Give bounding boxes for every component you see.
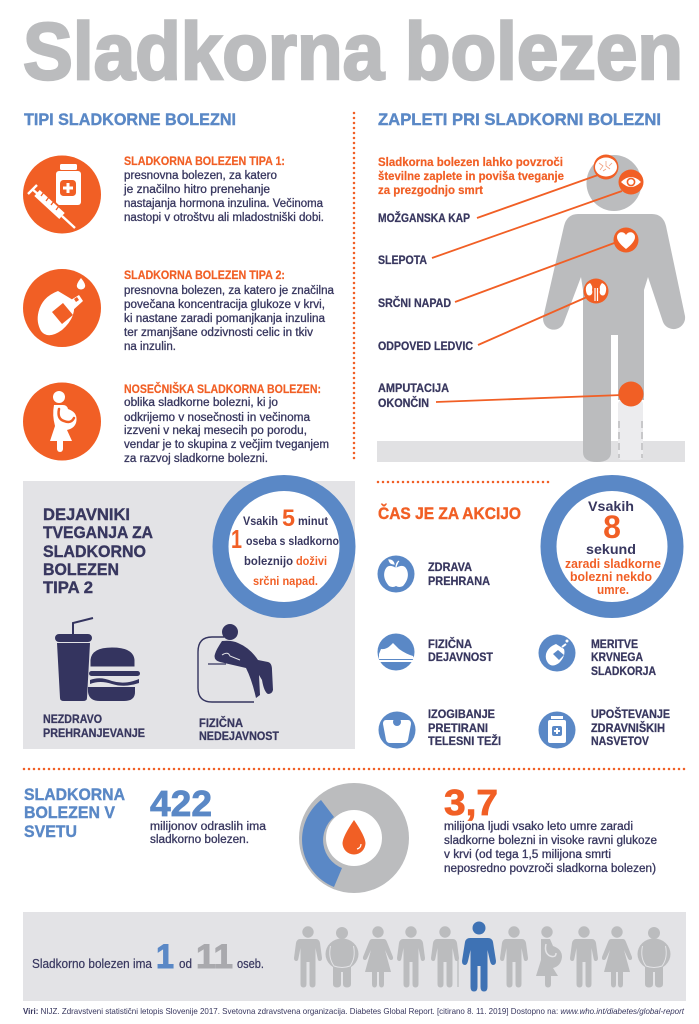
label: blood sugar measurement: KRVNEGA bbox=[591, 652, 643, 664]
heading: risk factors: TVEGANJA ZA bbox=[43, 523, 153, 542]
donut chart with blood drop bbox=[299, 783, 409, 893]
label: physical inactivity: NEDEJAVNOST bbox=[199, 731, 279, 743]
label: avoid overweight: PRETIRANI bbox=[428, 723, 488, 735]
label: blood sugar measurement bbox=[591, 639, 656, 678]
icon: medicine bottle bbox=[538, 712, 576, 748]
text: type 1: nastopi v otroštvu ali mladostniški dobi. bbox=[124, 212, 324, 224]
text: type 2: povečana koncentracija glukoze v krvi, bbox=[124, 299, 325, 311]
text: type 2: ki nastane zaradi pomanjkanja inzulina bbox=[124, 313, 326, 325]
label: amputation bbox=[378, 383, 449, 410]
label: physical inactivity bbox=[199, 717, 279, 743]
panel: complications bbox=[377, 110, 685, 462]
callout: every 8 seconds: 8 bbox=[603, 509, 621, 545]
panel: types of diabetes bbox=[23, 110, 335, 465]
text: gestational: NOSEČNIŠKA SLADKORNA BOLEZEN: bbox=[124, 383, 321, 396]
heading: risk factors: BOLEZEN bbox=[43, 560, 119, 579]
marker: amputation point bbox=[618, 382, 644, 406]
stat: 422 million: sladkorno bolezen. bbox=[150, 834, 249, 846]
text: gestational: za razvoj sladkorne bolezni. bbox=[124, 453, 268, 465]
panel: 1 in 11 people bbox=[23, 912, 686, 1001]
label: medical advice bbox=[591, 708, 670, 748]
label: avoid overweight: IZOGIBANJE bbox=[428, 709, 495, 721]
text: type 2: SLADKORNA BOLEZEN TIPA 2: bbox=[124, 270, 285, 282]
text: type 1: nastajanja hormona inzulina. Večinoma bbox=[124, 198, 324, 210]
callout: every 8 seconds: Vsakih bbox=[588, 498, 634, 514]
text: 1 in 11: oseb. bbox=[237, 957, 264, 971]
heading: world: SVETU bbox=[24, 822, 77, 841]
label: physical inactivity: FIZIČNA bbox=[199, 717, 243, 730]
text: complications intro bbox=[378, 157, 564, 197]
text: type 1 bbox=[123, 156, 324, 224]
stat: 422 million: milijonov odraslih ima bbox=[150, 821, 267, 833]
heading: risk factors: TIPA 2 bbox=[43, 578, 93, 597]
text: type 1: presnovna bolezen, za katero bbox=[124, 170, 277, 182]
icon: heart bbox=[614, 228, 638, 252]
text: complications intro: Sladkorna bolezen lahko povzroči bbox=[378, 157, 563, 169]
icon: weight scale bbox=[378, 712, 416, 748]
icon: pregnant woman bbox=[23, 382, 101, 460]
icon: meter small bbox=[538, 634, 576, 672]
stat: 3,7 million: milijona ljudi vsako leto umre zaradi bbox=[444, 821, 633, 833]
callout: every 8 seconds: sekund bbox=[586, 541, 636, 557]
label: amputation: OKONČIN bbox=[378, 397, 429, 410]
icon: apple bbox=[378, 556, 414, 592]
label: stroke: MOŽGANSKA KAP bbox=[378, 212, 470, 225]
label: physical activity: DEJAVNOST bbox=[428, 652, 493, 664]
text: 1 in 11: Sladkorno bolezen ima bbox=[32, 957, 152, 971]
heading: complications: ZAPLETI PRI SLADKORNI BOLEZNI bbox=[378, 110, 661, 129]
ground strip bbox=[377, 441, 685, 462]
source footnote: Viri: NIJZ. Zdravstveni statistični letopis Slovenije 2017. Svetovna zdravstvena organizacija. Diabetes Global Report. [citirano 8. 11. 2019] Dostopno na: www.who.int/diabetes/global-report bbox=[23, 1006, 685, 1016]
stat: 422 million bbox=[150, 783, 267, 846]
text: type 2: ter zmanjšane odzivnosti celic in tkiv bbox=[124, 327, 313, 339]
human figure bbox=[543, 155, 685, 462]
stat: 3,7 million: v krvi (od tega 1,5 milijona smrti bbox=[444, 849, 611, 861]
panel: risk factors bbox=[23, 481, 355, 749]
heading: time for action: ČAS JE ZA AKCIJO bbox=[378, 504, 521, 523]
label: medical advice: NASVETOV bbox=[591, 736, 649, 748]
callout: every 5 minutes: srčni napad. bbox=[253, 574, 318, 588]
callout: every 8 seconds: umre. bbox=[597, 583, 629, 597]
label: unhealthy diet: NEZDRAVO bbox=[43, 714, 102, 726]
icon: glucose meter bbox=[23, 269, 101, 347]
text: complications intro: številne zaplete in poviša tveganje bbox=[378, 171, 564, 183]
text: gestational: izzveni v nekaj mesecih po porodu, bbox=[124, 425, 307, 437]
icon: kidneys bbox=[584, 278, 608, 304]
callout: every 5 minutes: boleznijo bbox=[244, 554, 293, 568]
text: type 1: SLADKORNA BOLEZEN TIPA 1: bbox=[124, 156, 285, 168]
callout: every 8 seconds: zaradi sladkorne bbox=[565, 557, 661, 571]
person with cane bbox=[431, 926, 459, 988]
text: 1 in 11 bbox=[32, 938, 264, 976]
text: gestational: vendar je to skupina z večjim tveganjem bbox=[124, 439, 329, 451]
label: physical activity bbox=[428, 638, 493, 664]
icon: person on couch bbox=[198, 624, 273, 702]
pictogram: eleven people bbox=[294, 922, 670, 992]
text: type 2: presnovna bolezen, za katero je značilna bbox=[124, 285, 335, 297]
text: 1 in 11: 11 bbox=[196, 938, 233, 976]
heading: risk factors: SLADKORNO bbox=[43, 542, 146, 561]
label: unhealthy diet: PREHRANJEVANJE bbox=[43, 728, 145, 740]
text: gestational bbox=[124, 383, 329, 465]
heading: world: BOLEZEN V bbox=[24, 803, 116, 822]
label: unhealthy diet bbox=[43, 714, 145, 740]
label: kidney failure: ODPOVED LEDVIC bbox=[378, 341, 473, 353]
label: healthy diet: ZDRAVA bbox=[428, 562, 472, 574]
text: complications intro: za prezgodnjo smrt bbox=[378, 185, 483, 197]
connector lines bbox=[432, 175, 622, 402]
label: heart attack: SRČNI NAPAD bbox=[378, 297, 451, 310]
stat: 3,7 million: sladkorne bolezni in visoke ravni glukoze bbox=[444, 835, 657, 847]
heading: world: SLADKORNA bbox=[24, 785, 125, 804]
label: physical activity: FIZIČNA bbox=[428, 638, 472, 651]
callout: every 5 minutes: oseba s sladkorno bbox=[246, 534, 339, 548]
text: type 1: je značilno hitro prenehanje bbox=[123, 184, 270, 196]
callout: every 5 minutes: doživi bbox=[296, 554, 327, 568]
callout: every 5 minutes bbox=[220, 483, 348, 610]
text: gestational: oblika sladkorne bolezni, ki jo bbox=[124, 397, 278, 409]
label: blood sugar measurement: MERITVE bbox=[591, 639, 638, 651]
callout: every 5 minutes: Vsakih bbox=[243, 514, 278, 528]
label: blood sugar measurement: SLADKORJA bbox=[591, 666, 656, 678]
heading: risk factors bbox=[43, 505, 153, 597]
heading: types: TIPI SLADKORNE BOLEZNI bbox=[24, 110, 236, 129]
text: 1 in 11: od bbox=[179, 957, 192, 971]
callout: every 5 minutes: 1 bbox=[231, 524, 242, 554]
stat: 3,7 million: 3,7 bbox=[444, 782, 498, 823]
icon: drink and burger bbox=[55, 618, 140, 701]
label: blindness: SLEPOTA bbox=[378, 255, 427, 267]
text: 1 in 11: 1 bbox=[156, 938, 174, 976]
label: medical advice: UPOŠTEVANJE bbox=[591, 708, 670, 721]
label: avoid overweight: TELESNI TEŽI bbox=[428, 735, 501, 748]
icon: brain bbox=[594, 154, 618, 180]
heading: risk factors: DEJAVNIKI bbox=[43, 505, 130, 524]
highlighted person bbox=[462, 922, 496, 992]
callout: every 8 seconds bbox=[548, 483, 676, 610]
panel: diabetes in the world bbox=[24, 782, 657, 893]
label: avoid overweight bbox=[428, 709, 501, 748]
label: amputation: AMPUTACIJA bbox=[378, 383, 449, 395]
stat: 3,7 million bbox=[444, 782, 657, 875]
icon: shoe bbox=[378, 634, 414, 670]
pregnant woman bbox=[536, 926, 562, 988]
callout: every 8 seconds: bolezni nekdo bbox=[570, 570, 652, 584]
text: type 2 bbox=[124, 270, 335, 353]
icon: syringe and medicine bottle bbox=[23, 156, 101, 234]
callout: every 5 minutes: 5 bbox=[282, 505, 295, 532]
text: type 2: na inzulin. bbox=[124, 341, 176, 353]
callout: every 5 minutes: minut bbox=[298, 514, 328, 528]
label: healthy diet bbox=[428, 562, 490, 588]
heading: world bbox=[24, 785, 125, 841]
stat: 3,7 million: neposredno povzroči sladkorna bolezen) bbox=[444, 863, 656, 875]
icon: eye bbox=[618, 170, 644, 194]
text: gestational: odkrijemo v nosečnosti in večinoma bbox=[124, 412, 311, 424]
panel: time for action bbox=[378, 483, 676, 748]
stat: 422 million: 422 bbox=[150, 783, 212, 824]
label: healthy diet: PREHRANA bbox=[428, 576, 490, 588]
label: medical advice: ZDRAVNIŠKIH bbox=[591, 722, 665, 735]
